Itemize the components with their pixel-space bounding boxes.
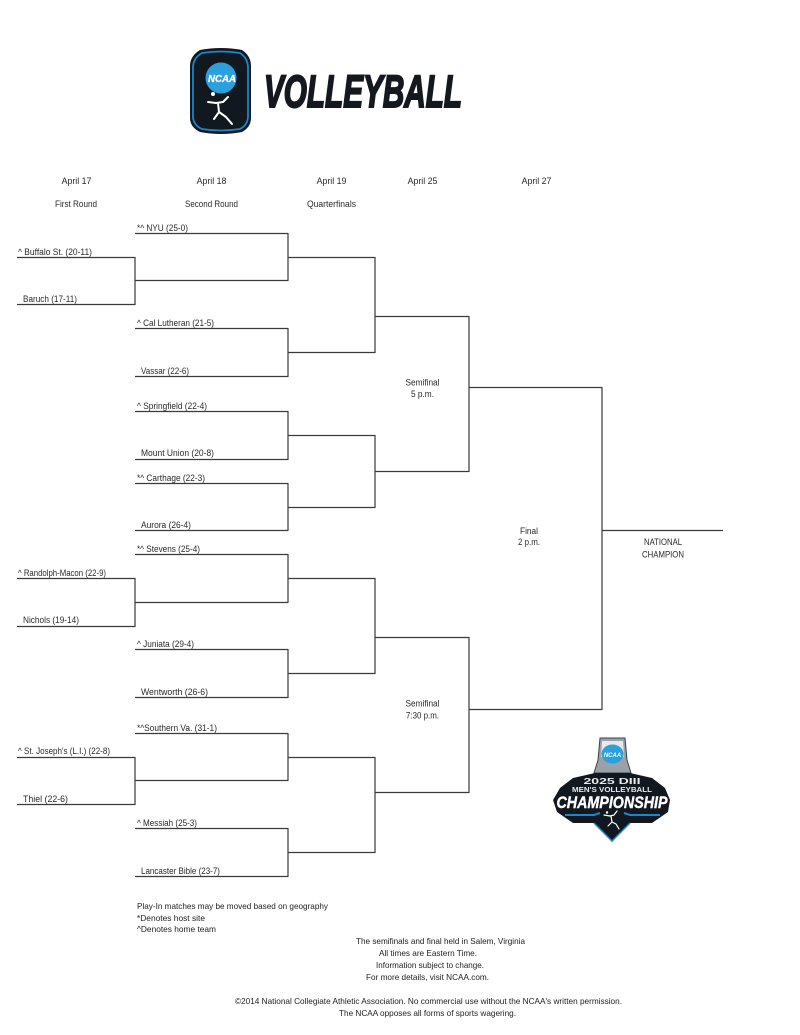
- notes: location and times: Information subject to change.: [376, 960, 484, 970]
- round header: April 19 Quarterfinals: Quarterfinals: [307, 199, 357, 209]
- NCAA shield logo: NCAA: [208, 73, 236, 85]
- 2025 DIII championship logo: CHAMPIONSHIP: [556, 793, 668, 812]
- notes: location and times: For more details, visit NCAA.com.: [366, 972, 489, 982]
- 2025 DIII championship logo: NCAA: [604, 753, 621, 759]
- first round teams: ^ Buffalo St. (20-11): [18, 247, 92, 257]
- semifinal 2 label: [406, 698, 440, 720]
- first round teams: Baruch (17-11): [23, 294, 77, 304]
- second round teams: Lancaster Bible (23-7): [141, 866, 220, 876]
- NCAA shield logo: [190, 48, 251, 134]
- copyright footer: The NCAA opposes all forms of sports wagering.: [339, 1008, 516, 1018]
- second round teams: ^ Springfield (22-4): [137, 401, 207, 411]
- 2025 DIII championship logo: MEN'S VOLLEYBALL: [572, 785, 652, 794]
- second round teams: Wentworth (26-6): [141, 687, 208, 697]
- 2025 DIII championship logo: [553, 738, 670, 842]
- notes: location and times: All times are Eastern Time.: [379, 948, 477, 958]
- first round teams: ^ Randolph-Macon (22-9): [18, 568, 106, 578]
- round header: April 18 Second Round: April 18: [197, 176, 227, 186]
- bracket lines: [17, 233, 723, 877]
- round header: April 27: April 27: [522, 176, 552, 186]
- first round teams: [18, 247, 110, 804]
- notes: play-in, host, home team: Play-In matches may be moved based on geography: [137, 901, 329, 911]
- round header: April 18 Second Round: Second Round: [185, 199, 238, 209]
- round header: April 17 First Round: First Round: [55, 199, 97, 209]
- second round teams: ^ Juniata (29-4): [137, 639, 194, 649]
- round header: April 19 Quarterfinals: April 19: [317, 176, 347, 186]
- national champion label: NATIONAL: [644, 537, 682, 547]
- first round teams: ^ St. Joseph's (L.I.) (22-8): [18, 746, 110, 756]
- semifinal 2 label: 7:30 p.m.: [406, 710, 439, 720]
- final label: 2 p.m.: [518, 537, 540, 547]
- semifinal 1 label: 5 p.m.: [411, 389, 434, 399]
- second round teams: Mount Union (20-8): [141, 448, 214, 458]
- round header: April 25: April 25: [408, 176, 438, 186]
- second round teams: *^ NYU (25-0): [137, 223, 188, 233]
- second round teams: *^Southern Va. (31-1): [137, 723, 217, 733]
- semifinal 1 label: [406, 378, 440, 399]
- round header: April 19 Quarterfinals: [307, 176, 357, 209]
- final label: Final: [520, 526, 538, 536]
- semifinal 1 label: Semifinal: [406, 378, 440, 388]
- copyright footer: ©2014 National Collegiate Athletic Association. No commercial use without the NCAA's written permission.: [235, 996, 622, 1006]
- second round teams: ^ Messiah (25-3): [137, 818, 197, 828]
- round header: April 17 First Round: [55, 176, 97, 209]
- national champion label: CHAMPION: [642, 550, 684, 560]
- second round teams: Aurora (26-4): [141, 520, 191, 530]
- semifinal 2 label: Semifinal: [406, 698, 440, 708]
- second round teams: ^ Cal Lutheran (21-5): [137, 318, 214, 328]
- 2025 DIII championship logo: 2025 DIII: [584, 776, 640, 786]
- first round teams: Nichols (19-14): [23, 615, 79, 625]
- notes: play-in, host, home team: *Denotes host site: [137, 913, 205, 923]
- VOLLEYBALL wordmark: VOLLEYBALL: [264, 66, 462, 117]
- notes: play-in, host, home team: [137, 901, 329, 934]
- second round teams: *^ Stevens (25-4): [137, 544, 200, 554]
- notes: location and times: The semifinals and final held in Salem, Virginia: [356, 936, 525, 946]
- second round teams: [137, 223, 220, 876]
- second round teams: Vassar (22-6): [141, 366, 189, 376]
- round header: April 17 First Round: April 17: [62, 176, 92, 186]
- national champion label: [642, 537, 684, 560]
- final label: [518, 526, 540, 547]
- second round teams: *^ Carthage (22-3): [137, 473, 205, 483]
- notes: location and times: [356, 936, 525, 982]
- first round teams: Thiel (22-6): [23, 794, 68, 804]
- notes: play-in, host, home team: ^Denotes home team: [137, 924, 216, 934]
- round header: April 18 Second Round: [185, 176, 238, 209]
- copyright footer: [235, 996, 622, 1018]
